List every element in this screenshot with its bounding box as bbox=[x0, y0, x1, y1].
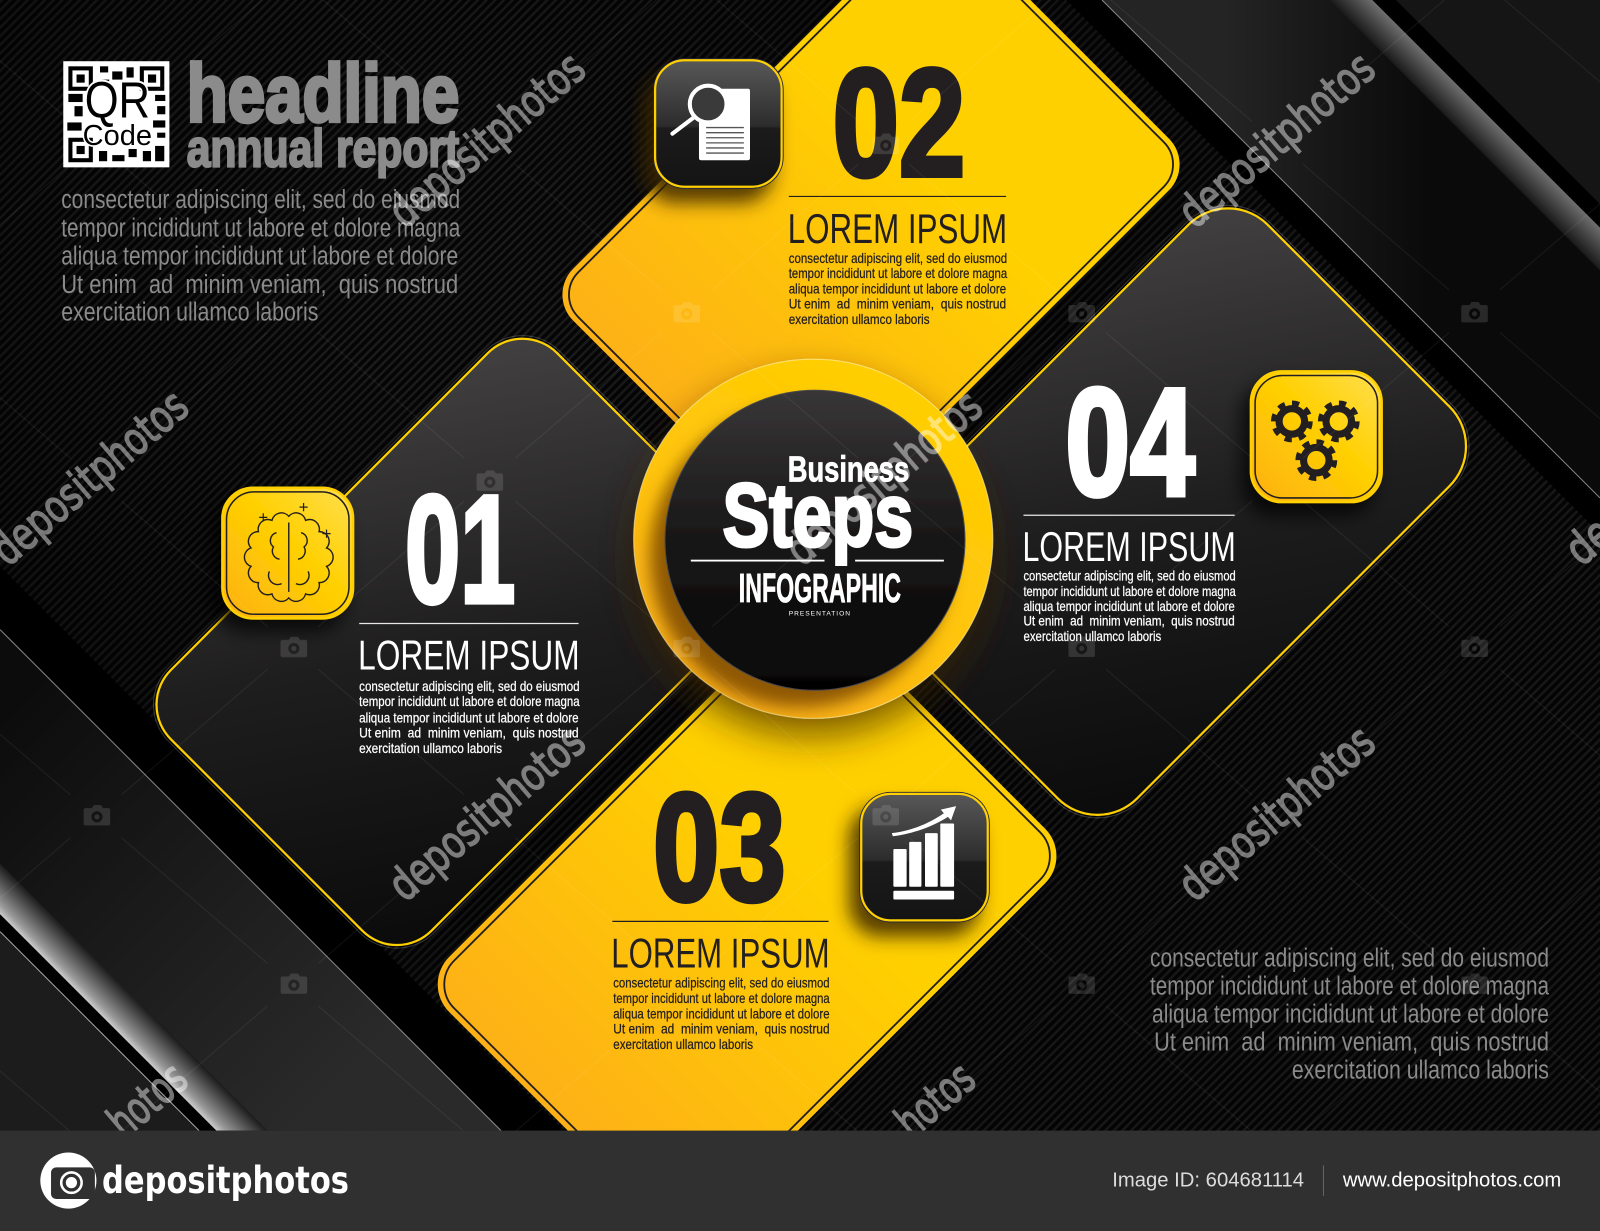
QR code: QR bbox=[85, 71, 150, 128]
step 01 text: consectetur adipiscing elit, sed do eiusmod bbox=[359, 678, 580, 694]
text block: top left paragraph bbox=[61, 186, 461, 326]
step 03 heading: LOREM IPSUM bbox=[611, 929, 830, 976]
badge title: Steps bbox=[722, 466, 913, 566]
step 02 text: aliqua tempor incididunt ut labore et dolore bbox=[789, 280, 1006, 296]
footer image id: Image ID: 604681114 bbox=[1112, 1170, 1304, 1192]
step 03 text: aliqua tempor incididunt ut labore et dolore bbox=[613, 1005, 830, 1021]
badge title: PRESENTATION bbox=[789, 610, 850, 617]
footer logo icon bbox=[40, 1153, 96, 1209]
band: bottom left metallic panel bbox=[0, 566, 564, 1131]
footer wordmark: depositphotos bbox=[102, 1158, 349, 1202]
step 01 text bbox=[359, 678, 580, 756]
step 01 text: exercitation ullamco laboris bbox=[359, 740, 502, 756]
step 03 text: Ut enim ad minim veniam, quis nostrud bbox=[613, 1021, 830, 1037]
footer url: www.depositphotos.com bbox=[1342, 1170, 1561, 1192]
step 03 text: consectetur adipiscing elit, sed do eiusmod bbox=[613, 975, 830, 991]
step 02 heading: LOREM IPSUM bbox=[788, 205, 1007, 252]
step 02 number: 02 bbox=[833, 38, 965, 209]
panel: step 02 bbox=[547, 0, 1195, 553]
outer yellow ring bbox=[634, 359, 993, 718]
text block: bottom right paragraph bbox=[1150, 944, 1550, 1085]
icon: magnifier and document bbox=[653, 58, 784, 189]
QR code: Code bbox=[83, 120, 152, 152]
step 02 text: Ut enim ad minim veniam, quis nostrud bbox=[789, 296, 1006, 312]
title: headline bbox=[187, 48, 459, 178]
step 02 text bbox=[789, 250, 1007, 327]
step 01 heading: LOREM IPSUM bbox=[358, 631, 580, 678]
badge title bbox=[691, 450, 944, 617]
watermark: depositphotos text: hotos bbox=[97, 1052, 198, 1148]
text block: top left paragraph: exercitation ullamco laboris bbox=[61, 298, 318, 326]
center circle badge bbox=[634, 359, 993, 718]
step 04 text: tempor incididunt ut labore et dolore magna bbox=[1023, 583, 1236, 599]
step 01 number: 01 bbox=[405, 464, 515, 635]
panel: step 01 bbox=[132, 314, 787, 970]
inner black disc bbox=[665, 390, 965, 690]
panel: step 03 bbox=[422, 595, 1072, 1231]
step 01 text: Ut enim ad minim veniam, quis nostrud bbox=[359, 725, 579, 741]
panel: step 04 bbox=[832, 181, 1494, 842]
step 04 number: 04 bbox=[1065, 357, 1195, 528]
step 04 text: Ut enim ad minim veniam, quis nostrud bbox=[1023, 612, 1235, 628]
step 04 heading: LOREM IPSUM bbox=[1022, 523, 1236, 570]
watermark: camera marks bbox=[84, 134, 1488, 994]
footer bar bbox=[0, 1131, 1600, 1231]
watermark: depositphotos text: depositphotos bbox=[378, 715, 595, 911]
step 03 text bbox=[613, 975, 830, 1052]
icon: rising bar chart bbox=[859, 792, 990, 922]
text block: top left paragraph: consectetur adipiscing elit, sed do eiusmod bbox=[61, 186, 460, 214]
step 01 text: tempor incididunt ut labore et dolore magna bbox=[359, 693, 580, 709]
badge title: INFOGRAPHIC bbox=[739, 565, 901, 611]
step 02 text: tempor incididunt ut labore et dolore magna bbox=[789, 265, 1007, 281]
step 03 text: tempor incididunt ut labore et dolore magna bbox=[613, 990, 830, 1006]
step 03 text: exercitation ullamco laboris bbox=[613, 1036, 753, 1052]
step 01 text: aliqua tempor incididunt ut labore et dolore bbox=[359, 709, 579, 725]
step 04 text bbox=[1023, 568, 1236, 644]
step 02 text: exercitation ullamco laboris bbox=[789, 311, 930, 327]
step 02 text: consectetur adipiscing elit, sed do eiusmod bbox=[789, 250, 1007, 266]
watermark: depositphotos text: depositphotos bbox=[775, 379, 992, 576]
watermark: depositphotos text: depositphotos bbox=[1168, 715, 1385, 911]
title: headline: headline bbox=[187, 48, 459, 139]
text block: top left paragraph: tempor incididunt ut labore et dolore magna bbox=[61, 215, 461, 243]
text block: top left paragraph: Ut enim ad minim veniam, quis nostrud bbox=[61, 271, 458, 299]
step 04 text: consectetur adipiscing elit, sed do eiusmod bbox=[1023, 568, 1236, 584]
title: headline: annual report bbox=[187, 119, 459, 178]
band: top right metallic panel bbox=[1066, 0, 1600, 534]
step 04 text: exercitation ullamco laboris bbox=[1023, 628, 1161, 644]
icon: brain bbox=[222, 488, 353, 618]
QR code bbox=[63, 61, 169, 167]
step 04 text: aliqua tempor incididunt ut labore et dolore bbox=[1023, 598, 1235, 614]
text block: top left paragraph: aliqua tempor incididunt ut labore et dolore bbox=[61, 242, 458, 270]
text block: bottom right paragraph: exercitation ullamco laboris bbox=[1292, 1057, 1549, 1085]
badge title: Business bbox=[788, 450, 909, 490]
watermark: depositphotos text: hotos bbox=[885, 1052, 985, 1148]
icon: gears bbox=[1251, 371, 1382, 502]
step 03 number: 03 bbox=[653, 762, 786, 933]
